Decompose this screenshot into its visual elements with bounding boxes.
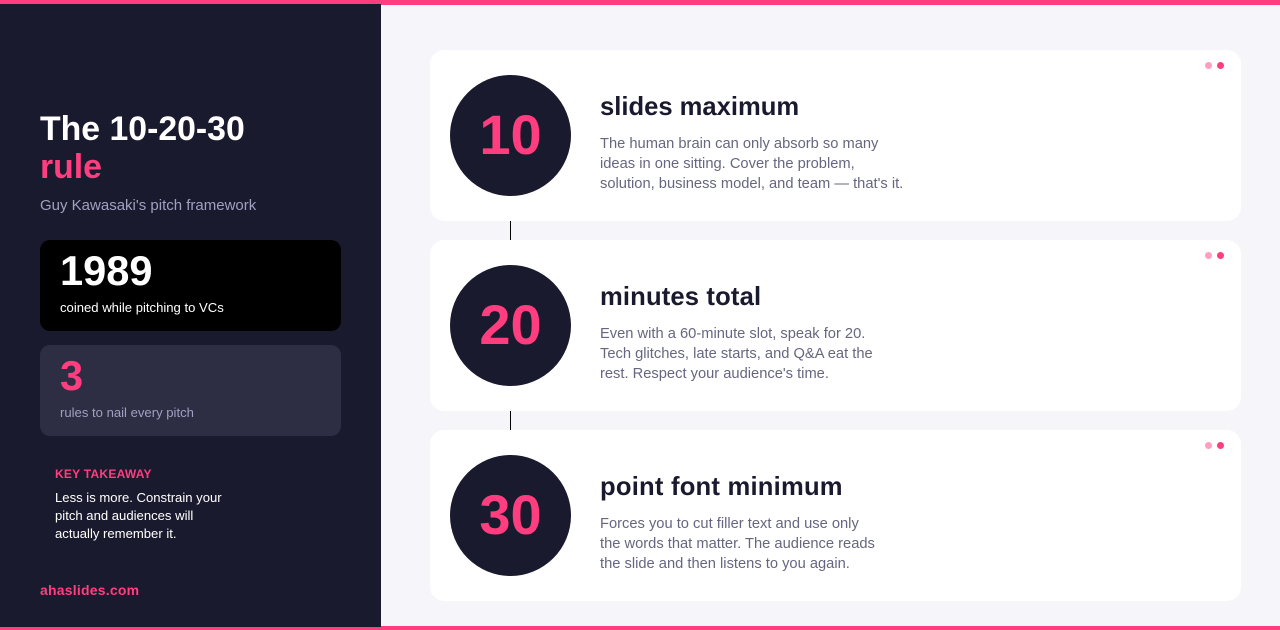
card: 20 minutes <box>430 240 1241 411</box>
number circle <box>450 265 571 386</box>
stat label: rules to nail every pitch <box>60 405 194 420</box>
title <box>40 110 245 186</box>
description: the words that matter. The audience reads <box>600 536 875 552</box>
brand url: ahaslides.com <box>40 582 139 598</box>
title: rule <box>40 148 102 186</box>
heading: point font minimum <box>600 473 843 501</box>
card: 10 slides <box>430 50 1241 221</box>
key takeaway <box>55 467 222 541</box>
takeaway text: Less is more. Constrain your <box>55 490 222 505</box>
stat label: coined while pitching to VCs <box>60 300 224 315</box>
description <box>600 326 873 382</box>
dots <box>1205 442 1224 449</box>
takeaway text <box>55 490 222 541</box>
number circle <box>450 455 571 576</box>
stat card: 1989 <box>40 240 341 331</box>
dots <box>1205 252 1224 259</box>
number circle: 30 <box>479 483 542 546</box>
description: ideas in one sitting. Cover the problem, <box>600 156 855 172</box>
number circle <box>450 75 571 196</box>
description: the slide and then listens to you again. <box>600 556 850 572</box>
title: The 10-20-30 <box>40 110 245 148</box>
card: 30 point <box>430 430 1241 601</box>
takeaway text: actually remember it. <box>55 526 177 541</box>
takeaway label: KEY TAKEAWAY <box>55 467 152 481</box>
description <box>600 516 875 572</box>
description: Even with a 60-minute slot, speak for 20. <box>600 326 865 342</box>
top accent bar <box>0 0 1280 5</box>
connector 2 <box>510 411 511 430</box>
description: solution, business model, and team — that's it. <box>600 176 903 192</box>
stat card: 3 <box>40 345 341 436</box>
heading: minutes total <box>600 283 761 311</box>
description: The human brain can only absorb so many <box>600 136 878 152</box>
description <box>600 136 903 192</box>
dots <box>1205 62 1224 69</box>
left panel <box>0 4 381 627</box>
number circle: 20 <box>479 293 542 356</box>
description: rest. Respect your audience's time. <box>600 366 829 382</box>
takeaway text: pitch and audiences will <box>55 508 193 523</box>
description: Tech glitches, late starts, and Q&A eat the <box>600 346 873 362</box>
number circle: 10 <box>479 103 542 166</box>
subtitle: Guy Kawasaki's pitch framework <box>40 197 256 214</box>
stat value: 1989 <box>60 247 153 294</box>
connector 1 <box>510 221 511 240</box>
bottom accent bar <box>0 626 1280 630</box>
heading: slides maximum <box>600 93 799 121</box>
stat value: 3 <box>60 352 83 399</box>
description: Forces you to cut filler text and use only <box>600 516 859 532</box>
